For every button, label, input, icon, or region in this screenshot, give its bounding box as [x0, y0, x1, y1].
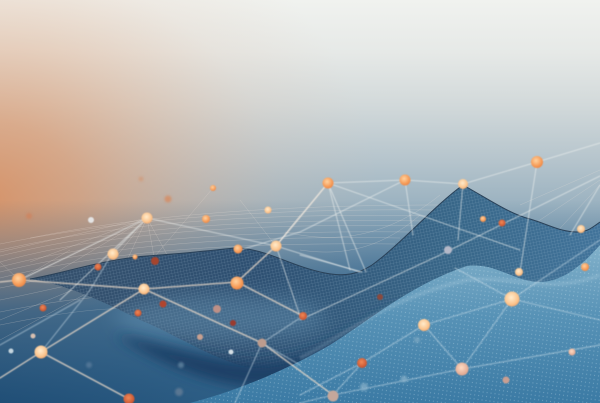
node: orange: [270, 240, 282, 252]
node: peach large: [504, 292, 520, 306]
network links: [0, 143, 600, 403]
node: dark small: [377, 294, 383, 300]
node: small cream: [577, 225, 585, 233]
node: peach: [418, 319, 430, 331]
node: small orange: [498, 220, 506, 226]
node: cream: [458, 179, 468, 189]
node: white small: [88, 217, 94, 223]
node: cream: [34, 346, 48, 358]
node: cream: [142, 212, 152, 224]
links: upper web: [20, 143, 600, 320]
front light wave: [190, 245, 600, 403]
node: pale small: [197, 334, 203, 340]
links: warm left strand: [0, 183, 333, 399]
dark mesh wave: [30, 185, 600, 370]
node: pale: [328, 390, 338, 402]
deep shadow trough: [115, 306, 400, 388]
node: pale peach: [456, 362, 468, 376]
node: pale small: [30, 334, 36, 338]
node: white small: [8, 348, 14, 354]
node: small orange: [581, 263, 589, 271]
node: pale small: [502, 376, 510, 384]
node: orange: [234, 244, 242, 254]
node: dark red small: [230, 320, 236, 326]
node: small orange: [132, 254, 138, 260]
mid blue mesh sheet: [0, 250, 600, 403]
node: small cream: [515, 268, 523, 276]
lighter mesh sheet below the ridge: [115, 294, 325, 342]
node: large orange: [230, 276, 244, 290]
node: small pale: [568, 348, 576, 356]
node: grey-lilac: [444, 246, 452, 254]
node: dark red small: [160, 300, 166, 308]
node: orange: [264, 206, 272, 214]
node: dark red small: [151, 257, 159, 265]
node: orange: [322, 178, 334, 188]
node: red: [357, 358, 367, 368]
node: white small: [228, 350, 234, 354]
node: cream: [138, 284, 150, 294]
node: red small: [134, 310, 142, 316]
node: pale small: [213, 305, 221, 313]
node: small orange faded: [210, 185, 216, 191]
node: red small: [40, 304, 46, 312]
faint blurred background nodes: [26, 176, 420, 396]
node: red small: [94, 264, 102, 270]
node: large orange: [12, 273, 26, 287]
links: lower front web: [0, 240, 600, 403]
node: dark red: [299, 312, 307, 320]
node: orange: [400, 174, 410, 186]
network nodes: [8, 156, 589, 403]
node: taupe: [258, 338, 266, 348]
back fine mesh lines: [0, 170, 600, 340]
node: orange: [531, 156, 543, 168]
node: cream: [108, 248, 118, 260]
node: orange: [202, 215, 210, 223]
node: small orange: [480, 216, 486, 222]
node: red: [124, 394, 134, 403]
